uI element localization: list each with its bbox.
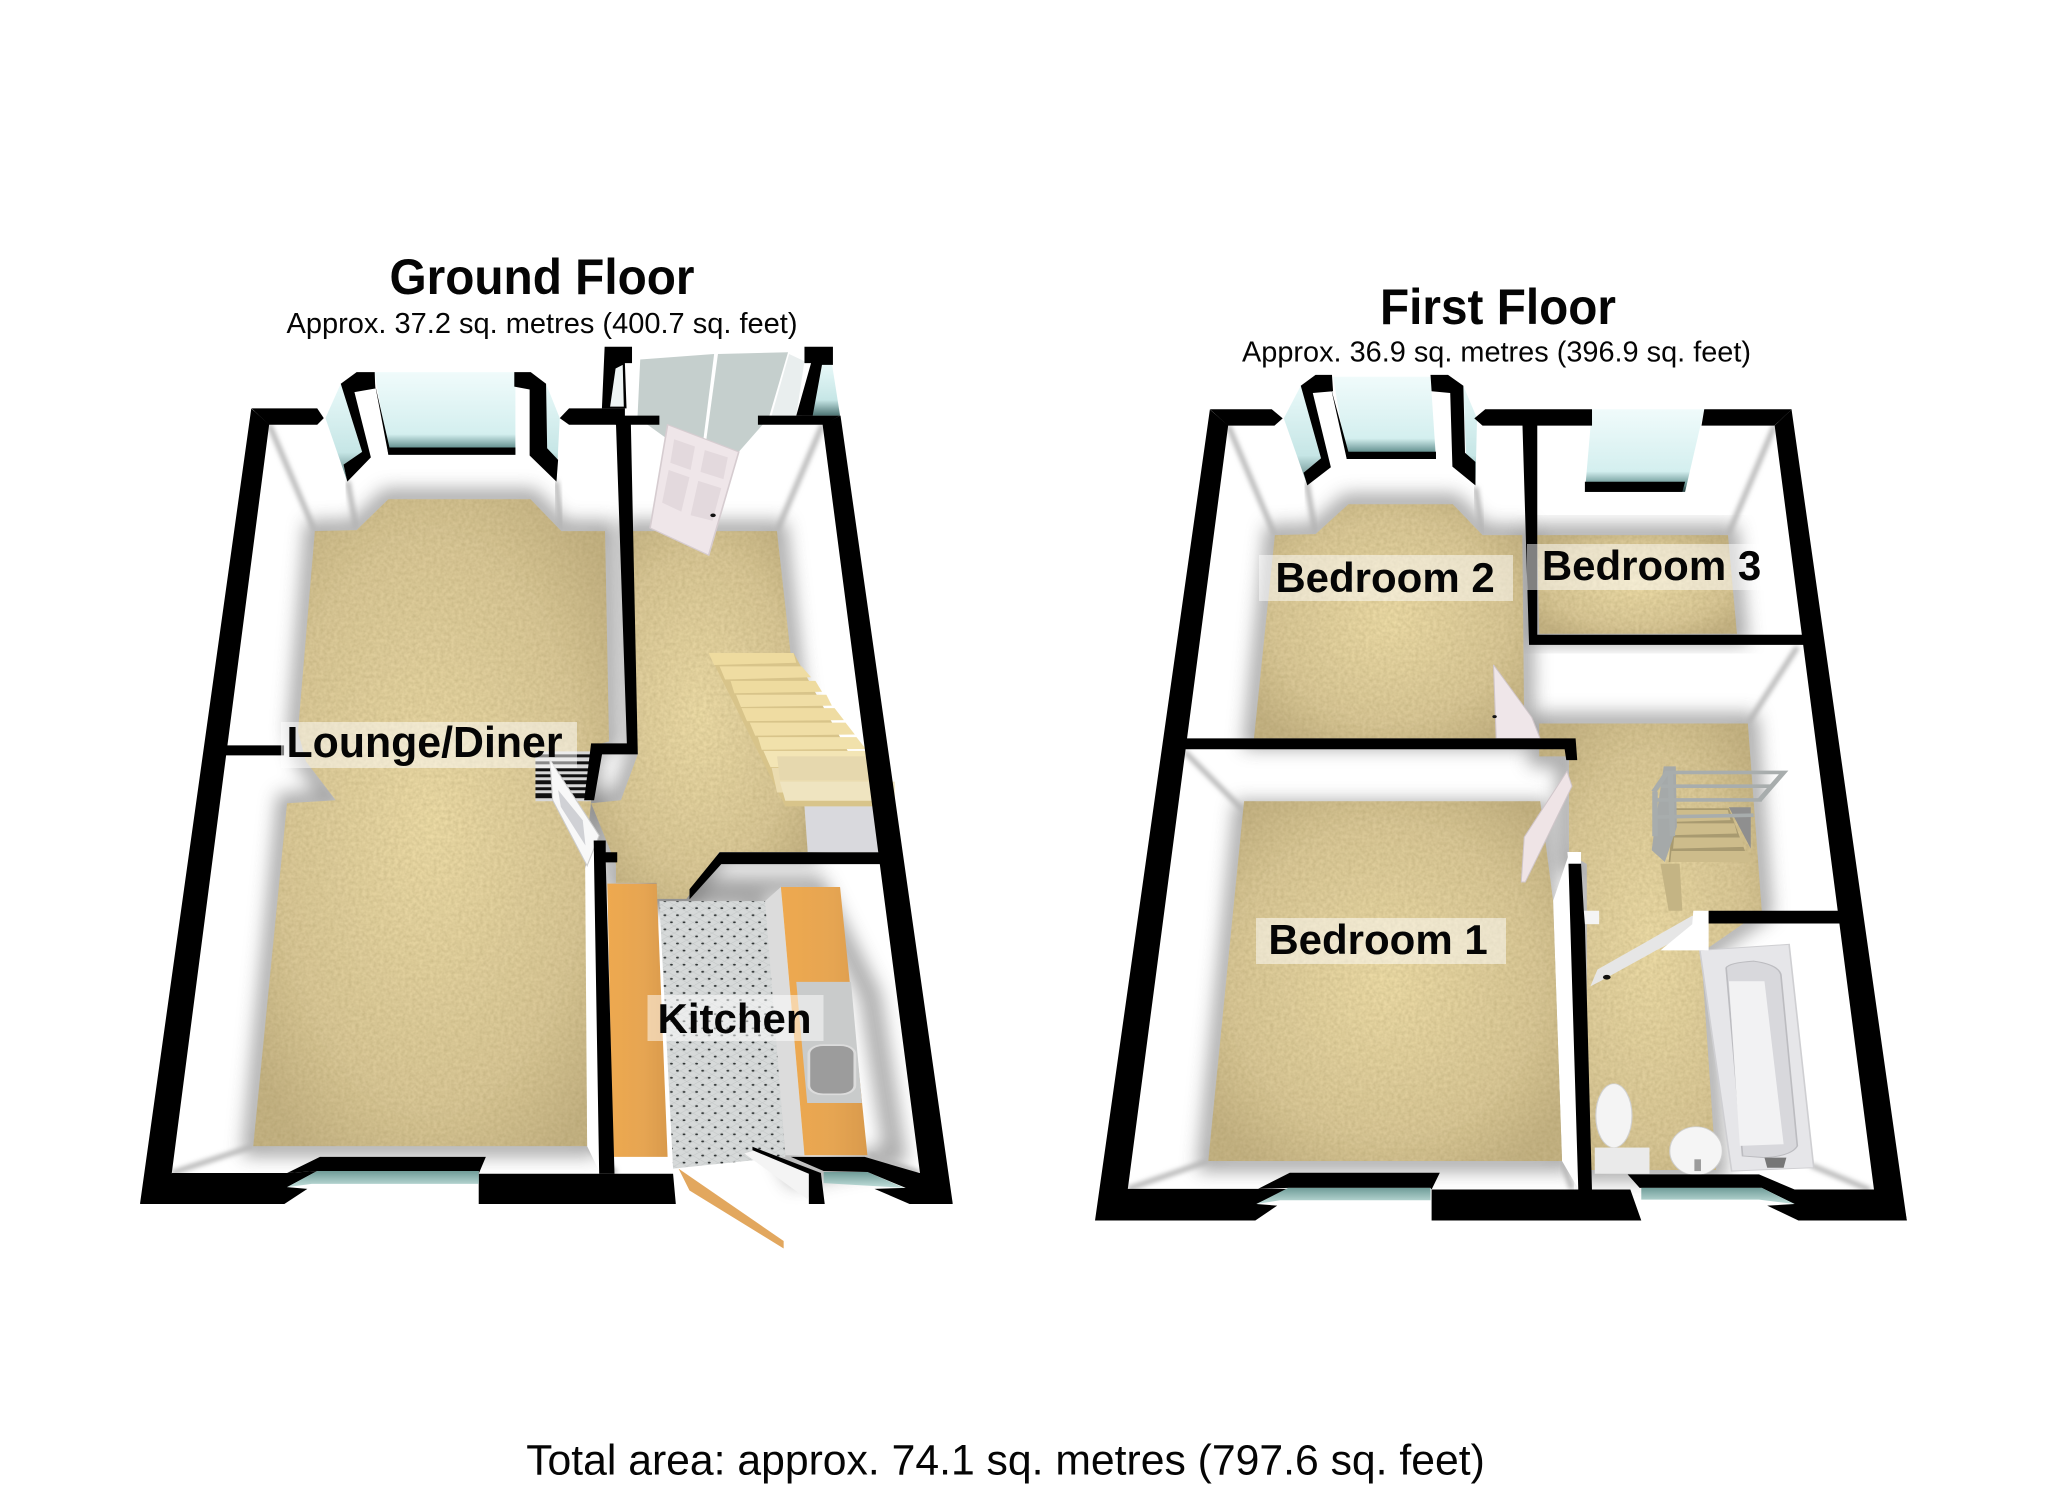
bathroom bottom wall: [1628, 1174, 1907, 1220]
left counter: [607, 884, 668, 1157]
lounge floor: [253, 499, 609, 1146]
hall floor: [591, 531, 808, 899]
wall shading first floor: [1128, 425, 1870, 1190]
label: Lounge/Diner: Lounge/Diner: [286, 718, 562, 767]
wall shading ground floor: [172, 424, 919, 1175]
ground floor heading: Approx. 37.2 sq. metres (400.7 sq. feet): [287, 308, 797, 340]
first floor heading: [1242, 279, 1751, 368]
panel: first floor plan: [1095, 375, 1907, 1220]
bathroom window glass: [1641, 1188, 1795, 1204]
doors: first floor: [1492, 665, 1709, 986]
under-stairs panel: [804, 796, 878, 852]
right counter: [781, 887, 867, 1155]
door: hall: [650, 425, 739, 555]
kitchen window glass: [824, 1172, 904, 1188]
bath: [1700, 944, 1814, 1171]
kitchen back wall: [690, 852, 881, 899]
toilet: [1595, 1084, 1650, 1174]
outer left wall: [1095, 410, 1228, 1220]
back door jamb: [744, 1150, 821, 1199]
pier stub: [224, 745, 284, 755]
total area caption: Total area: approx. 74.1 sq. metres (797.6 sq. feet): [526, 1436, 1485, 1484]
outer left wall: [140, 409, 269, 1204]
label: Bedroom 3: Bedroom 3: [1542, 542, 1761, 589]
sink bowl: [809, 1045, 855, 1094]
lounge window glass: [287, 1171, 479, 1187]
walls: ground floor: [140, 408, 953, 1248]
stairs with balustrade: [1652, 766, 1784, 911]
label: Bedroom 1: Bedroom 1: [1268, 916, 1488, 963]
wall between bedroom 1 and bathroom: [1568, 864, 1592, 1191]
label: Bedroom 2: Bedroom 2: [1275, 554, 1495, 601]
kitchen counters and sink: [607, 884, 867, 1157]
outer right wall: [823, 415, 953, 1204]
bedroom 2 floor: [1254, 504, 1524, 738]
bedroom 1 bottom wall: [1095, 1189, 1288, 1220]
lounge-kitchen wall: [594, 841, 617, 1174]
basin: [1670, 1127, 1722, 1175]
door: lounge with hatching: [535, 751, 599, 866]
back door leaf: [679, 1169, 784, 1248]
ground floor heading: Ground Floor: [390, 249, 694, 305]
windows: bedroom 2 bay and bedroom 3: [1284, 375, 1704, 492]
panel: ground floor plan: [140, 347, 953, 1248]
outer right wall: [1775, 410, 1907, 1220]
landing and bathroom floor: [1539, 723, 1762, 1170]
first floor heading: Approx. 36.9 sq. metres (396.9 sq. feet): [1242, 336, 1751, 368]
lounge bottom wall: [140, 1171, 317, 1204]
window: lounge bay: [325, 372, 560, 482]
stairs: [709, 653, 884, 806]
stairs foot: [777, 756, 895, 801]
bathroom back wall: [1709, 911, 1841, 924]
right bottom wall: [791, 1157, 952, 1204]
first floor heading: First Floor: [1380, 279, 1616, 335]
white wall strip beside lounge door: [584, 841, 600, 1173]
back door and window: hall: [602, 347, 840, 463]
divider wall: [584, 422, 638, 800]
kitchen tile floor: [659, 901, 785, 1169]
bedroom 1 window glass: [1256, 1188, 1431, 1204]
sink drainer: [796, 982, 862, 1103]
label: Kitchen: Kitchen: [657, 995, 812, 1042]
bedroom 1 floor: [1208, 801, 1562, 1161]
ground floor heading: [287, 249, 797, 340]
walls: first floor: [1095, 409, 1907, 1220]
base units: [765, 887, 804, 1155]
bedroom 3 floor: [1537, 535, 1737, 634]
white wall strip beside bedroom 1: [1553, 854, 1579, 1190]
